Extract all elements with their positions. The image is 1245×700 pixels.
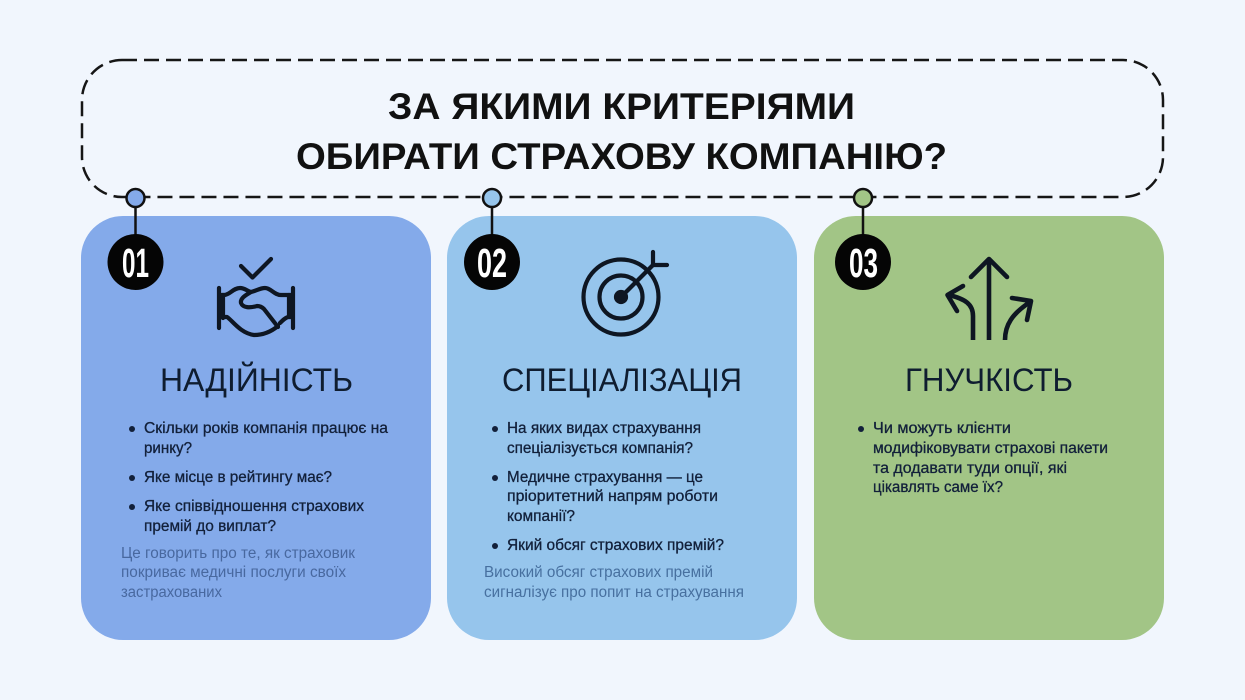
title xyxy=(296,86,947,177)
bullet list xyxy=(129,420,388,535)
panel: specialization xyxy=(447,189,797,640)
connector and number badge 03: 03 xyxy=(849,240,878,286)
heading: ГНУЧКІСТЬ xyxy=(905,362,1073,398)
bullet list: Яке співвідношення страхових xyxy=(144,498,364,515)
connector and number badge 01 xyxy=(108,189,164,290)
bullet list: спеціалізується компанія? xyxy=(507,440,693,457)
note xyxy=(484,564,744,601)
bullet list: ринку? xyxy=(144,440,192,457)
bullet list: Скільки років компанія працює на xyxy=(144,420,388,437)
panel: reliability xyxy=(81,189,431,640)
bullet list xyxy=(492,420,724,554)
bullet list: пріоритетний напрям роботи xyxy=(507,488,718,505)
connector and number badge 03 xyxy=(835,189,891,290)
bullet list: Чи можуть клієнти xyxy=(873,420,1011,437)
bullet list: модифіковувати страхові пакети xyxy=(873,440,1108,457)
note xyxy=(121,545,355,601)
bullet list: Яке місце в рейтингу має? xyxy=(144,469,332,486)
panel: flexibility xyxy=(814,189,1164,640)
bullet list: На яких видах страхування xyxy=(507,420,701,437)
note: покриває медичні послуги своїх xyxy=(121,564,346,581)
icon: target with arrow xyxy=(584,252,667,334)
note: Високий обсяг страхових премій xyxy=(484,564,713,581)
bullet list: Медичне страхування — це xyxy=(507,469,703,486)
bullet list: цікавлять саме їх? xyxy=(873,479,1003,496)
icon: handshake with check mark xyxy=(219,259,293,335)
bullet list: та додавати туди опції, які xyxy=(873,460,1067,477)
bullet list: премій до виплат? xyxy=(144,518,276,535)
connector and number badge 01: 01 xyxy=(122,240,149,286)
bullet list: компанії? xyxy=(507,508,575,525)
connector and number badge 02: 02 xyxy=(477,240,507,286)
title: ОБИРАТИ СТРАХОВУ КОМПАНІЮ? xyxy=(296,136,947,177)
note: сигналізує про попит на страхування xyxy=(484,584,744,601)
bullet list: Який обсяг страхових премій? xyxy=(507,537,724,554)
connector and number badge 02 xyxy=(464,189,520,290)
title: ЗА ЯКИМИ КРИТЕРІЯМИ xyxy=(388,86,855,127)
heading: НАДІЙНІСТЬ xyxy=(160,362,353,398)
note: Це говорить про те, як страховик xyxy=(121,545,355,562)
title frame xyxy=(82,60,1163,197)
note: застрахованих xyxy=(121,584,222,601)
icon: diverging arrows xyxy=(948,259,1031,340)
heading: СПЕЦІАЛІЗАЦІЯ xyxy=(502,362,742,398)
bullet list xyxy=(858,420,1108,496)
